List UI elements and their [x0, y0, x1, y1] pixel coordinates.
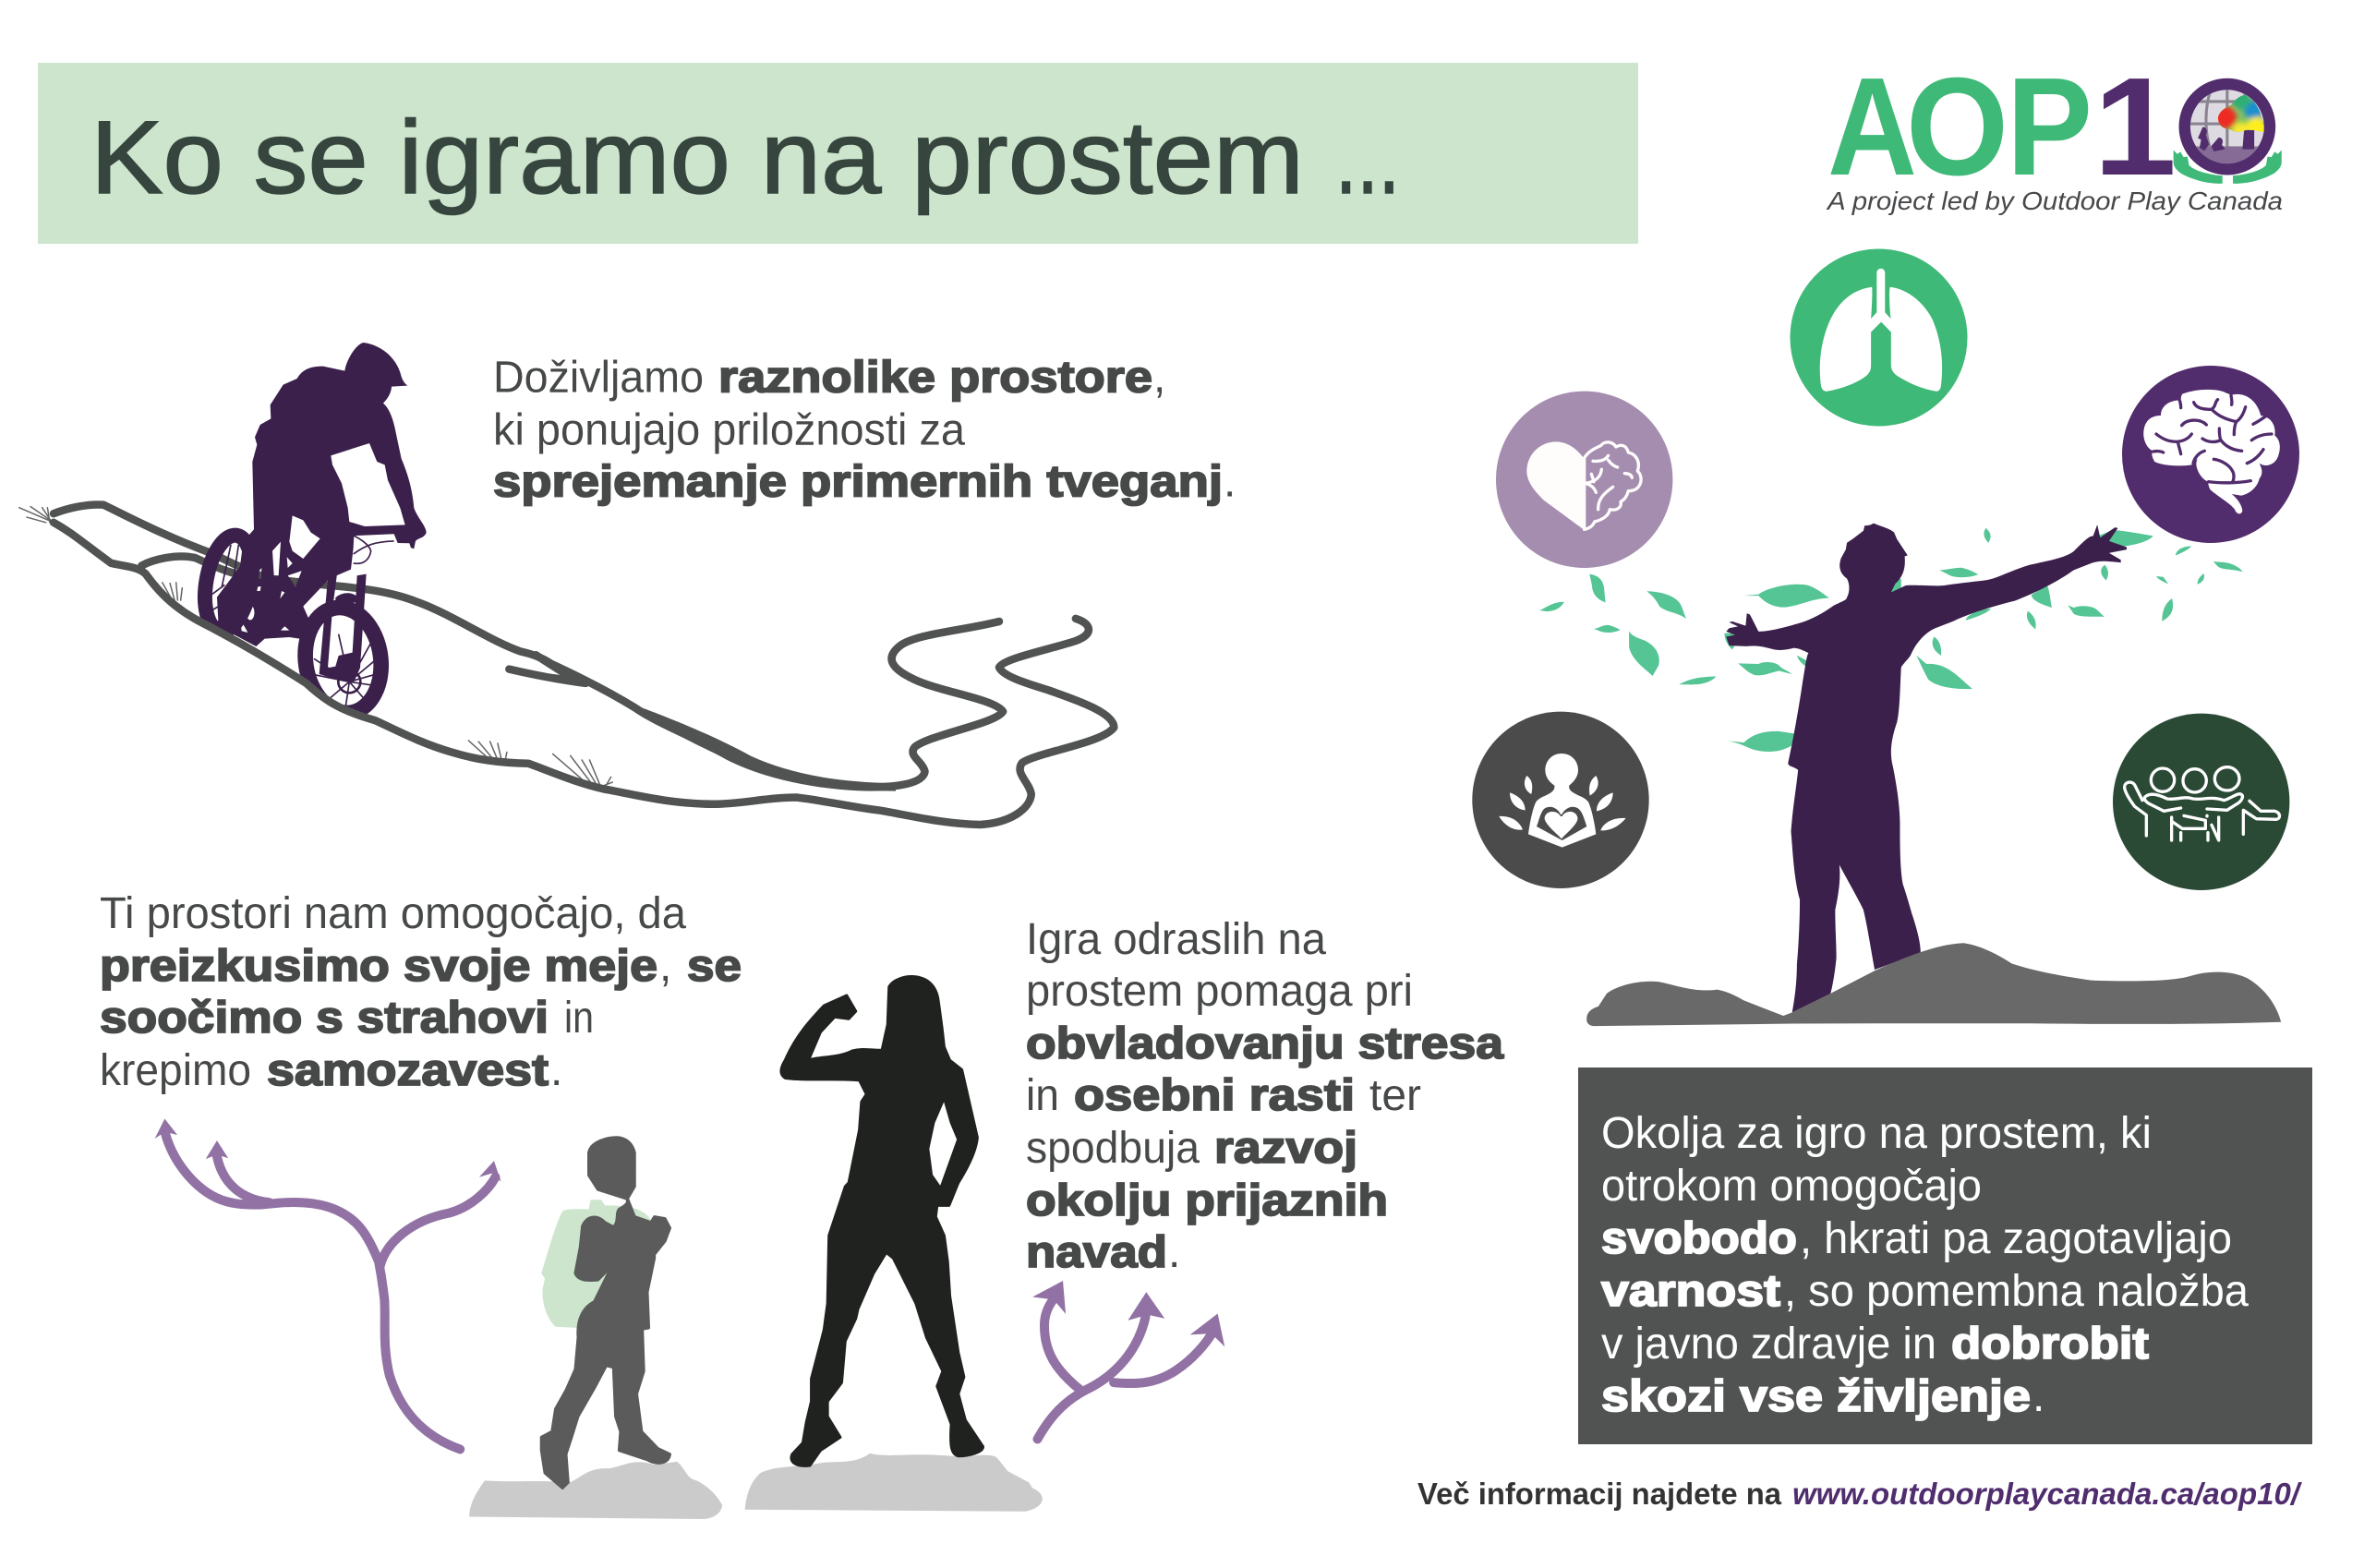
text block: adult play: navad [1026, 1228, 1167, 1277]
text block: adult play: in [1026, 1071, 1059, 1120]
text block: adult play [1026, 915, 1503, 1277]
logo wordmark AOP [1827, 48, 2093, 204]
grass tufts [19, 507, 612, 788]
callout text: varnost [1601, 1267, 1780, 1316]
text block: testing limits: Ti prostori nam omogočajo, da [100, 889, 686, 938]
icon: heart and brain [1496, 392, 1672, 568]
trail lower edge [54, 523, 1114, 825]
footer link: www.outdoorplaycanada.ca/aop10/ [1792, 1477, 2303, 1511]
backpack [541, 1200, 651, 1328]
text block: testing limits: samozavest [267, 1046, 549, 1095]
logo wordmark AOP: O [1906, 48, 2008, 204]
callout text: v javno zdravje in [1601, 1320, 1936, 1369]
text block: varied spaces: raznolike prostore [718, 353, 1152, 403]
text block: varied spaces: ki ponujajo priložnosti za [493, 406, 965, 454]
icon: people together [2113, 714, 2289, 890]
callout text: Okolja za igro na prostem, ki [1601, 1109, 2152, 1158]
callout text: svobodo [1601, 1214, 1797, 1263]
text block: varied spaces: . [1224, 458, 1236, 506]
illustration: cyclist silhouette [185, 343, 427, 732]
text block: adult play: osebni rasti [1074, 1071, 1355, 1120]
callout text: dobrobit [1951, 1320, 2149, 1369]
logo hands [2174, 151, 2282, 184]
bike fork [320, 574, 367, 681]
text block: testing limits: . [550, 1046, 562, 1095]
callout text: otrokom omogočajo [1601, 1162, 1982, 1211]
text block: testing limits: se [687, 942, 742, 991]
text block: adult play: spodbuja [1026, 1124, 1200, 1173]
AOP10 logo [1827, 78, 2282, 215]
front wheel [298, 603, 388, 718]
callout text: , hkrati pa zagotavljajo [1800, 1214, 2232, 1263]
logo digit 1: 1 [2093, 48, 2177, 204]
text block: adult play: Igra odraslih na [1026, 915, 1326, 964]
hill under person [1586, 943, 2281, 1026]
text block: testing limits: krepimo [100, 1046, 251, 1095]
icon: branching arrow left [155, 1118, 501, 1449]
text block: testing limits: preizkusimo svoje meje [100, 942, 657, 991]
callout text: skozi vse življenje [1601, 1372, 2031, 1421]
text block: varied spaces: , [1153, 353, 1165, 403]
rear wheel [199, 532, 259, 635]
text block: varied spaces [493, 353, 1236, 506]
text block: testing limits: soočimo s strahovi [100, 994, 549, 1043]
woman flexing [745, 977, 1043, 1512]
rider body and bike frame [217, 343, 427, 646]
callout text: . [2032, 1372, 2044, 1421]
logo tagline: A project led by Outdoor Play Canada [1826, 187, 2283, 215]
rock under child [469, 1462, 722, 1519]
title banner [38, 63, 1638, 244]
text block: testing limits: in [564, 994, 594, 1043]
footer link [1417, 1477, 2303, 1511]
title text: ... [1335, 100, 1400, 215]
text block: adult play: prostem pomaga pri [1026, 967, 1413, 1016]
text block: adult play: razvoj [1214, 1124, 1357, 1173]
falling leaves [1539, 528, 2243, 752]
child silhouette [541, 1138, 670, 1488]
rock under woman [745, 1453, 1043, 1512]
callout text: , so pomembna naložba [1784, 1267, 2249, 1316]
text block: adult play: okolju prijaznih [1026, 1176, 1388, 1225]
person with open arms [1586, 524, 2281, 1026]
logo globe ring [2179, 78, 2275, 175]
text block: varied spaces: sprejemanje primernih tveganj [493, 458, 1223, 506]
text block: testing limits [100, 889, 742, 1095]
woman silhouette [781, 977, 983, 1465]
text block: adult play: . [1168, 1228, 1180, 1277]
callout text [1601, 1109, 2249, 1421]
icon: branching arrow right [1032, 1281, 1224, 1439]
text block: adult play: ter [1369, 1071, 1421, 1120]
text block: adult play: obvladovanju stresa [1026, 1019, 1503, 1068]
title text: Ko se igramo na prostem [90, 100, 1304, 215]
child with backpack [469, 1138, 722, 1519]
text block: testing limits: , [659, 942, 671, 991]
logo wordmark AOP: P [2007, 48, 2093, 204]
icon: brain [2122, 366, 2299, 543]
icon: lungs [1790, 249, 1967, 427]
illustration: mountain bike trail [19, 504, 1003, 791]
text block: varied spaces: Doživljamo [493, 353, 704, 403]
footer link: Več informacij najdete na [1417, 1477, 1782, 1511]
brake cables [354, 536, 394, 563]
logo wordmark AOP: A [1827, 48, 1917, 204]
callout panel [1578, 1067, 2312, 1444]
icon: meditating person with heart [1472, 712, 1649, 888]
